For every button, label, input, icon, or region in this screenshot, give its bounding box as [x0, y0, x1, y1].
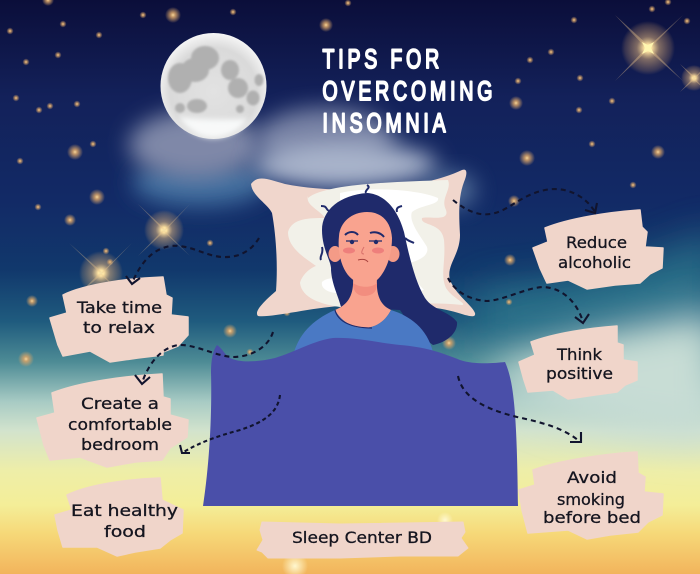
callout: think positive [519, 326, 637, 399]
shirt [293, 310, 433, 356]
blanket [203, 338, 518, 506]
title [322, 44, 492, 138]
callout: create a comfortable bedroom: Create a [81, 394, 159, 413]
callout: reduce alcoholic: Reduce [566, 233, 627, 252]
callout: avoid smoking before bed: Avoid [567, 468, 617, 487]
callout: avoid smoking before bed [519, 452, 663, 539]
callout: create a comfortable bedroom: comfortable [68, 415, 172, 434]
title: INSOMNIA [322, 108, 446, 138]
callout: create a comfortable bedroom [37, 374, 188, 467]
dashed connector arrows [126, 189, 597, 453]
callout: take time to relax: to relax [83, 318, 155, 337]
arrow: to avoid smoking [458, 376, 581, 442]
label: sleep center bd [257, 522, 468, 558]
callout: think positive: positive [546, 364, 613, 383]
neck [335, 278, 391, 328]
callout: eat healthy food: Eat healthy [71, 501, 178, 520]
label: sleep center bd: Sleep Center BD [292, 528, 432, 547]
pillow [251, 170, 475, 316]
arrow: to take time to relax [126, 238, 259, 284]
callout: avoid smoking before bed: smoking [557, 490, 625, 509]
callout: avoid smoking before bed: before bed [543, 508, 641, 527]
arrow: to create a bedroom [135, 332, 273, 384]
hair [322, 193, 457, 345]
callout: think positive: Think [556, 345, 603, 364]
icon: full moon [160, 33, 266, 139]
callout: reduce alcoholic [533, 210, 663, 289]
title: TIPS FOR [322, 44, 439, 74]
face [328, 212, 400, 283]
callout: eat healthy food: food [104, 522, 146, 541]
callout: take time to relax: Take time [76, 298, 162, 317]
callout: take time to relax [50, 277, 188, 362]
arrow: to reduce alcoholic [453, 189, 597, 214]
callout: create a comfortable bedroom: bedroom [81, 435, 159, 454]
illustration: woman lying in bed [203, 170, 518, 506]
callout: eat healthy food [55, 478, 183, 556]
stray hair strands [321, 185, 414, 260]
arrow: to comfortable bedroom [180, 395, 280, 453]
arrow: to think positive [448, 278, 589, 323]
callout: reduce alcoholic: alcoholic [558, 253, 631, 272]
title: OVERCOMING [322, 76, 492, 106]
